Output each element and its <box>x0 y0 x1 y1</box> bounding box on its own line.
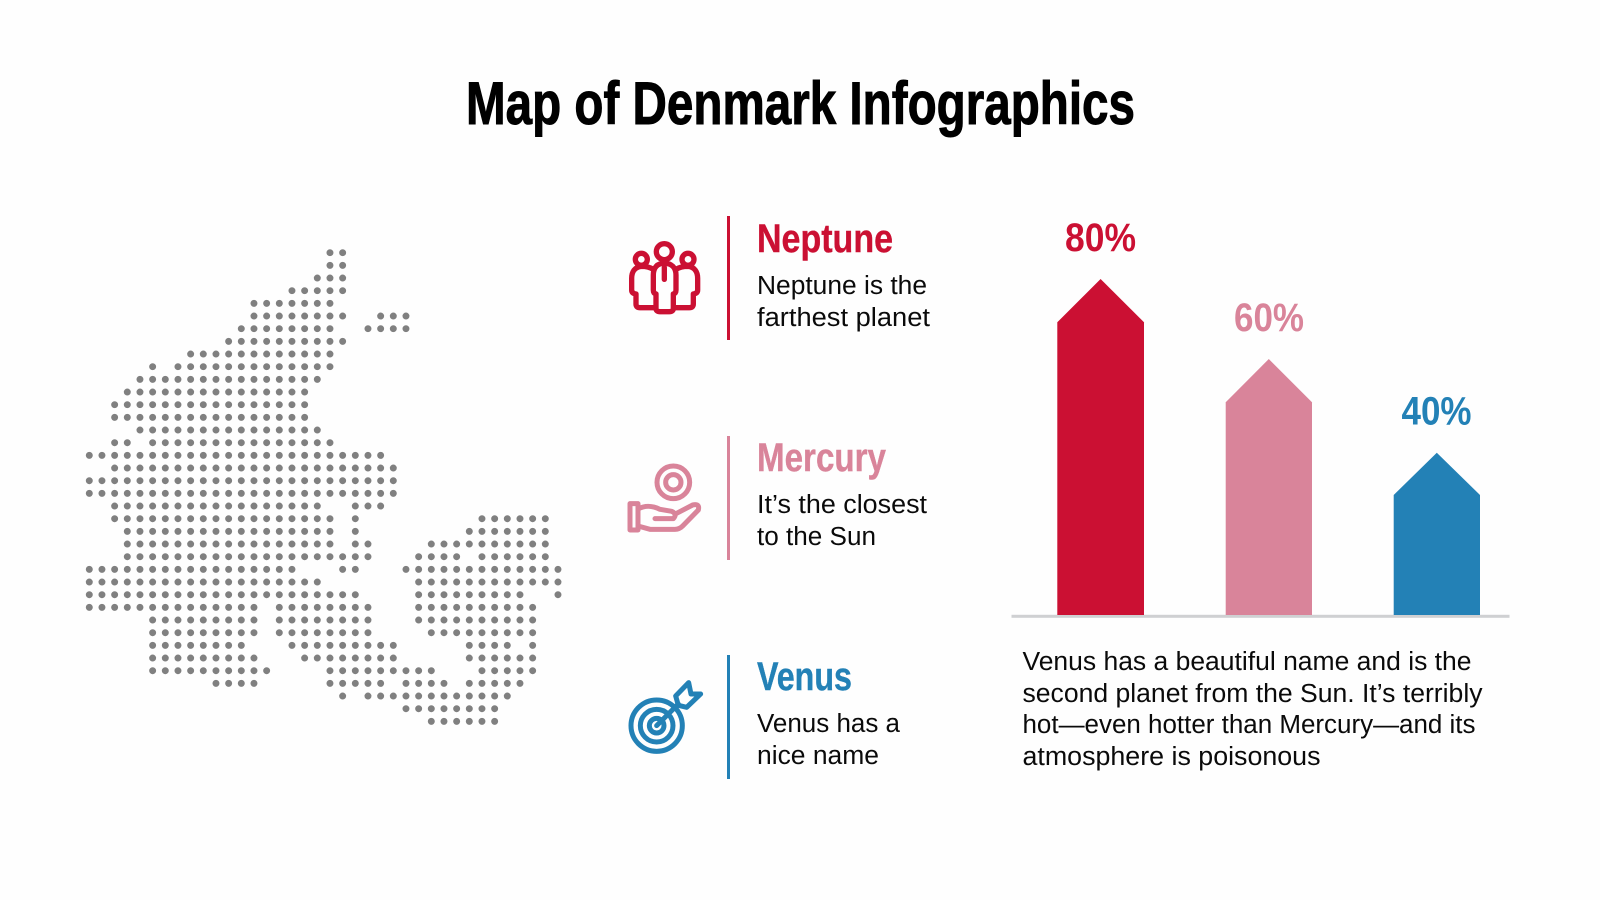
dotted map of Denmark <box>89 253 558 721</box>
label: 80%: 80% <box>1065 216 1136 260</box>
text: Mercury description: It’s the closest <box>757 491 927 519</box>
divider: Venus <box>727 655 730 779</box>
panel: Mercury <box>630 436 927 560</box>
heading: Venus: Venus <box>757 655 852 699</box>
text: Neptune description <box>757 272 930 332</box>
panel: Neptune <box>632 216 930 340</box>
axis <box>1012 615 1510 618</box>
text: Venus description <box>757 710 901 770</box>
text: Venus description: Venus has a <box>757 710 901 738</box>
bar: 80% <box>1057 279 1144 615</box>
text: Venus paragraph: second planet from the Sun. It’s terribly <box>1022 680 1483 708</box>
icon: hand with coin <box>630 466 699 530</box>
heading: Mercury: Mercury <box>757 436 887 480</box>
text: Venus paragraph: atmosphere is poisonous <box>1022 743 1320 771</box>
text: Venus paragraph <box>1022 648 1483 771</box>
text: Neptune description: farthest planet <box>757 304 930 332</box>
text: Venus paragraph: hot—even hotter than Mercury—and its <box>1022 711 1476 739</box>
bar: 40% <box>1394 453 1480 615</box>
heading: Neptune: Neptune <box>757 217 893 261</box>
label: 40%: 40% <box>1402 390 1472 434</box>
icon: people <box>632 244 698 312</box>
divider: Neptune <box>727 216 730 340</box>
text: Mercury description: to the Sun <box>757 523 876 551</box>
text: Venus description: nice name <box>757 742 879 770</box>
title: Map of Denmark Infographics <box>466 70 1135 137</box>
text: Neptune description: Neptune is the <box>757 272 927 300</box>
label: 60%: 60% <box>1234 296 1304 340</box>
text: Venus paragraph: Venus has a beautiful name and is the <box>1022 648 1472 676</box>
bar: 60% <box>1226 359 1312 615</box>
divider: Mercury <box>727 436 730 560</box>
text: Mercury description <box>757 491 927 551</box>
panel: Venus <box>631 655 901 779</box>
icon: target with arrow <box>631 683 701 751</box>
bar chart <box>1012 216 1510 618</box>
